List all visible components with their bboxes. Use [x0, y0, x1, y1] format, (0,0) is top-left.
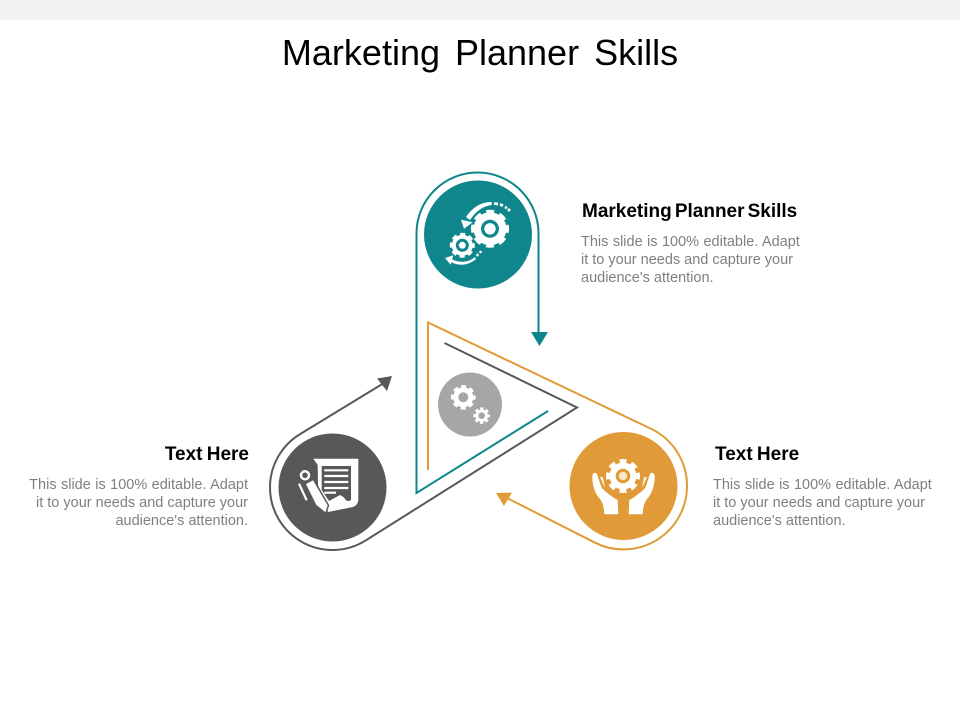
dark gray icon circle: document and pencil — [278, 434, 386, 542]
icon: circular arrows — [445, 202, 510, 265]
text block: right Text Here: Text Here — [715, 444, 799, 465]
text block: left Text Here: Text Here — [165, 444, 249, 465]
text block: left Text Here: audience's attention. — [115, 513, 248, 529]
orange looped arrow — [428, 322, 687, 549]
text block: right Text Here: audience's attention. — [713, 513, 846, 529]
icon: small center gear — [475, 409, 489, 423]
center gray circle with gears — [438, 372, 502, 436]
orange icon circle: hands holding gear — [570, 432, 678, 540]
text block: left Text Here — [29, 444, 249, 529]
text block: right Text Here: This slide is 100% editable. Adapt — [713, 477, 932, 493]
icon: left hand — [592, 473, 618, 514]
text block: Marketing Planner Skills: Marketing Planner Skills — [582, 201, 797, 222]
text block: Marketing Planner Skills: audience's attention. — [581, 270, 714, 286]
gray looped arrow — [270, 343, 577, 550]
title: Marketing Planner Skills — [282, 32, 678, 73]
text block: left Text Here: it to your needs and capture your — [36, 495, 248, 511]
text block: left Text Here: This slide is 100% editable. Adapt — [29, 477, 248, 493]
teal icon circle: rotating gears — [424, 180, 532, 288]
icon: document — [313, 459, 358, 512]
text block: right Text Here: it to your needs and capture your — [713, 495, 925, 511]
text block: Marketing Planner Skills — [581, 201, 800, 286]
icon: small gear — [451, 234, 473, 256]
text block: right Text Here — [713, 444, 932, 529]
icon: right hand — [629, 473, 655, 514]
top band — [0, 0, 960, 20]
icon: pencil — [299, 471, 328, 514]
teal looped arrow — [416, 172, 548, 493]
icon: large gear — [473, 212, 507, 246]
text block: Marketing Planner Skills: This slide is 100% editable. Adapt — [581, 234, 800, 250]
text block: Marketing Planner Skills: it to your needs and capture your — [581, 252, 793, 268]
icon: gear — [608, 461, 638, 491]
icon: large center gear — [453, 387, 474, 408]
